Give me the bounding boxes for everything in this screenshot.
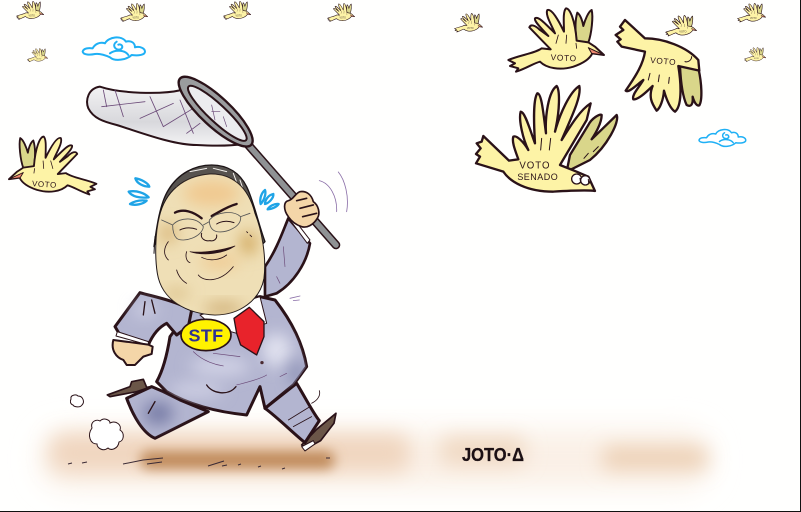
back shoe (107, 379, 152, 397)
fist (113, 340, 153, 365)
shirt collar (200, 297, 267, 333)
bird top with VOTO (508, 8, 604, 72)
torso jacket (157, 297, 307, 415)
small bird 8 (738, 3, 766, 22)
big bird VOTO SENADO (476, 86, 617, 192)
bird left with VOTO (9, 137, 96, 194)
STF badge (181, 319, 231, 351)
hair (154, 165, 265, 253)
small bird 2 (120, 3, 148, 22)
cloud right (699, 130, 746, 146)
raised hand (285, 192, 319, 227)
small bird 9 (744, 47, 766, 62)
big bird VOTO SENADO: SENADO (517, 172, 558, 182)
head face (156, 174, 265, 315)
bird top with VOTO: VOTO (550, 52, 577, 63)
sweat drops (129, 178, 279, 209)
red tie (234, 307, 264, 355)
small bird 5: VOTO (36, 59, 42, 61)
motion lines (290, 172, 347, 301)
dust puff large (90, 419, 123, 450)
small bird 5 (27, 48, 48, 62)
bird right diving with VOTO (616, 20, 701, 112)
ground dust shadow (40, 430, 710, 488)
small bird 6: VOTO (467, 28, 474, 30)
front shoe (302, 413, 336, 451)
small bird 8: VOTO (750, 18, 757, 20)
small bird 4 (327, 3, 355, 22)
small bird 2: VOTO (133, 17, 139, 19)
dust puff small (70, 395, 83, 407)
net hoop and handle (170, 68, 336, 245)
small bird 1 (16, 1, 44, 19)
left arm sleeve (115, 293, 192, 345)
small bird 7: VOTO (679, 29, 687, 33)
man running with net (87, 68, 347, 451)
small bird 3: VOTO (236, 15, 242, 17)
cloud left (83, 37, 145, 60)
small bird 1: VOTO (29, 15, 35, 17)
back leg (127, 387, 208, 438)
bird right diving with VOTO: VOTO (650, 55, 677, 67)
butterfly net bag (87, 87, 243, 146)
bird left with VOTO: VOTO (32, 179, 57, 190)
small bird 6 (455, 13, 483, 32)
small bird 3 (223, 1, 251, 19)
signature: JOTO·Δ (462, 445, 524, 465)
small bird 7 (666, 16, 697, 36)
small bird 9: VOTO (754, 58, 760, 60)
front leg (265, 383, 320, 443)
raised arm sleeve (265, 218, 310, 297)
STF badge: STF (189, 326, 223, 346)
big bird VOTO SENADO: VOTO (519, 160, 551, 171)
small bird 4: VOTO (340, 17, 346, 19)
